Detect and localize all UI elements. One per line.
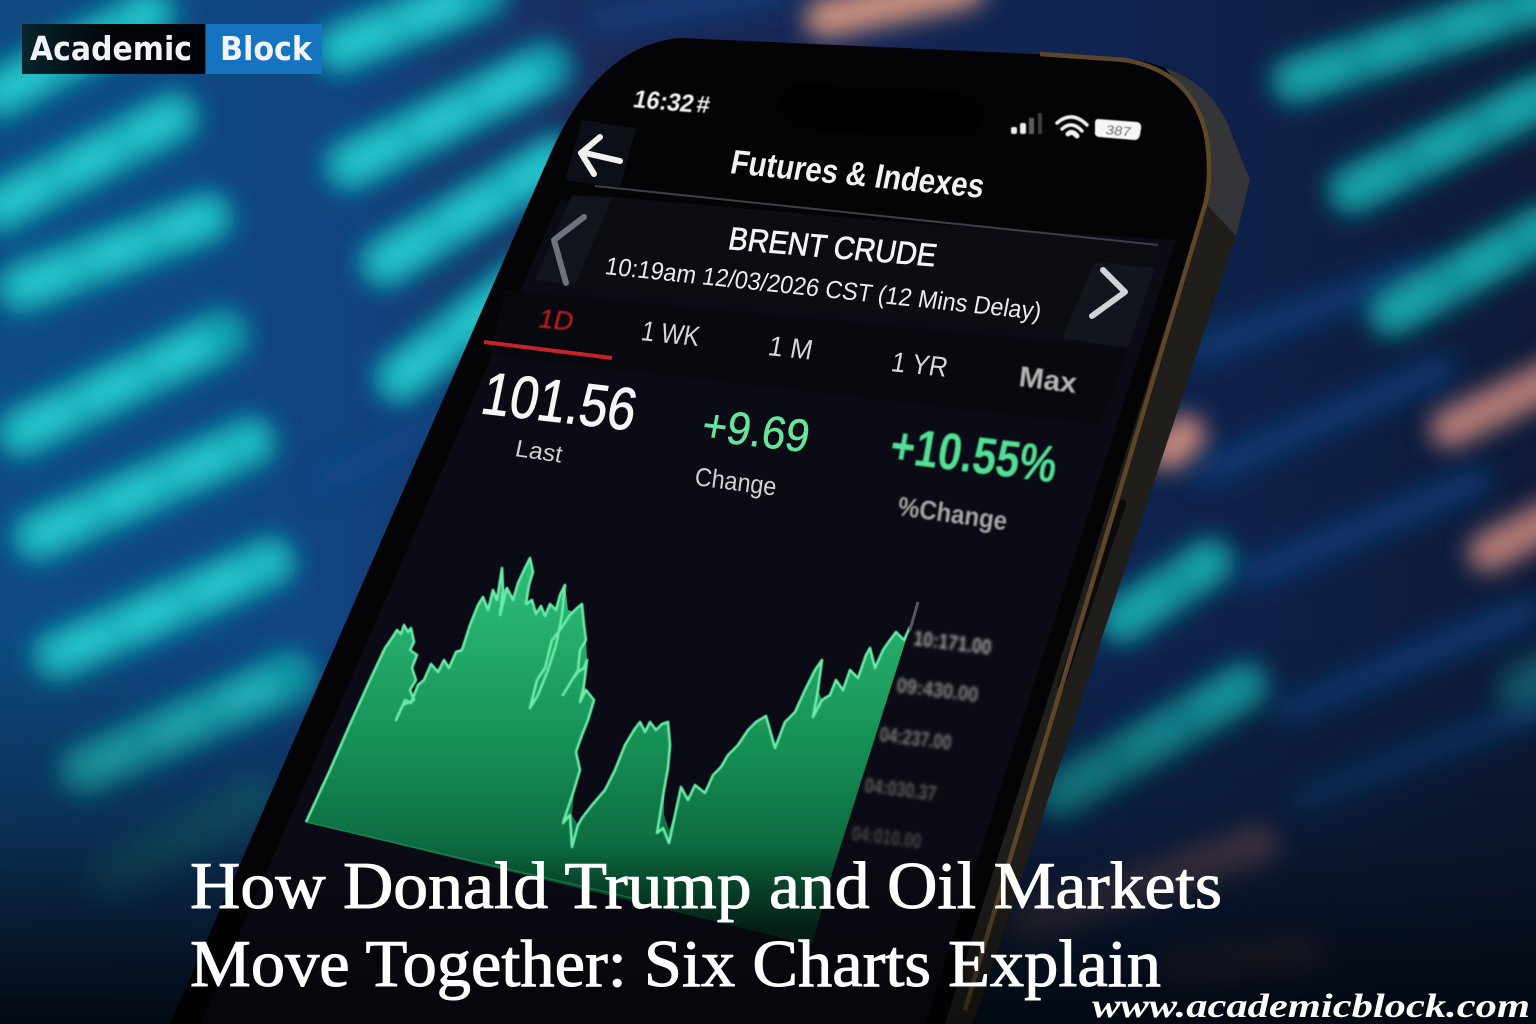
tab strip tint bbox=[490, 290, 1128, 425]
last price: 101.56 bbox=[476, 360, 643, 443]
status bar bbox=[631, 85, 1141, 140]
left teal bars highlights bbox=[0, 0, 555, 770]
chart axis labels: 09:430.00 bbox=[895, 674, 980, 707]
chart axis labels: 04:030.37 bbox=[863, 774, 938, 806]
phone top corner cap bbox=[1165, 68, 1250, 236]
change value: +9.69 bbox=[698, 399, 814, 462]
percent change label: %Change bbox=[896, 491, 1009, 536]
logo right block bbox=[206, 24, 322, 74]
last label: Last bbox=[513, 435, 565, 468]
signal icon bbox=[1011, 113, 1042, 134]
right teal bars base bbox=[1060, 0, 1536, 795]
chart area fill bbox=[306, 558, 910, 945]
left arrow button tint bbox=[565, 120, 636, 188]
quote figures bbox=[476, 360, 1062, 536]
battery icon: 387 bbox=[1104, 122, 1133, 139]
left teal bars base bbox=[0, 0, 555, 770]
website url: www.academicblock.com bbox=[1092, 988, 1530, 1024]
phone body bbox=[170, 38, 1250, 1024]
clock: 16:32 bbox=[631, 85, 697, 118]
phone screen bbox=[200, 200, 1176, 1024]
back arrow bbox=[581, 137, 620, 174]
headline line 1: How Donald Trump and Oil Markets bbox=[190, 849, 1222, 923]
headline bbox=[190, 849, 1222, 1001]
battery icon bbox=[1095, 119, 1141, 140]
divider line bbox=[595, 186, 1158, 245]
lower vignette bbox=[0, 640, 1536, 1024]
previous chevron bbox=[554, 217, 584, 283]
phone bronze edge bbox=[965, 54, 1209, 1010]
phone bbox=[170, 38, 1250, 1024]
bottom shade bbox=[0, 840, 1536, 1024]
focus icon: # bbox=[695, 91, 711, 119]
chart axis labels: 04:237.00 bbox=[878, 723, 953, 755]
tab underline bbox=[484, 342, 612, 358]
change label: Change bbox=[693, 461, 778, 502]
chart price line bbox=[306, 558, 910, 847]
salmon bars bbox=[825, 0, 1536, 972]
phone side frame bbox=[945, 203, 1236, 1024]
right teal bars highlights bbox=[1060, 0, 1536, 795]
dim blue streaks bbox=[330, 0, 1536, 800]
chart axis labels: 04:010.00 bbox=[850, 822, 923, 853]
logo word Academic: Academic bbox=[30, 29, 192, 68]
chart axis labels bbox=[850, 627, 993, 853]
faint lower teal bars bbox=[112, 672, 1536, 880]
next chevron bbox=[1092, 270, 1125, 316]
instrument name: BRENT CRUDE bbox=[726, 220, 940, 273]
headline line 2: Move Together: Six Charts Explain bbox=[190, 927, 1161, 1001]
next button tint bbox=[1062, 262, 1155, 348]
logo word Block: Block bbox=[220, 29, 313, 68]
side button bbox=[1061, 503, 1123, 686]
area chart bbox=[306, 558, 993, 945]
tab 1 WK: 1 WK bbox=[639, 315, 703, 352]
dynamic island bbox=[780, 84, 983, 138]
timestamp: 10:19am 12/03/2026 CST (12 Mins Delay) bbox=[603, 252, 1044, 326]
header panel tint bbox=[540, 195, 1158, 345]
screen title: Futures & Indexes bbox=[727, 144, 988, 206]
logo left block bbox=[22, 24, 205, 74]
prev button tint bbox=[535, 195, 612, 285]
tab 1D: 1D bbox=[536, 303, 577, 336]
logo bbox=[22, 24, 322, 74]
wifi icon bbox=[1057, 117, 1087, 136]
tab 1 M: 1 M bbox=[766, 330, 816, 366]
percent change value: +10.55% bbox=[886, 417, 1062, 494]
tab 1 YR: 1 YR bbox=[889, 346, 950, 383]
range tabs bbox=[484, 303, 1079, 400]
tab Max: Max bbox=[1017, 361, 1079, 400]
chart baseline bbox=[306, 822, 640, 900]
chart current-value tick bbox=[910, 602, 918, 630]
chart axis labels: 10:171.00 bbox=[912, 627, 993, 659]
